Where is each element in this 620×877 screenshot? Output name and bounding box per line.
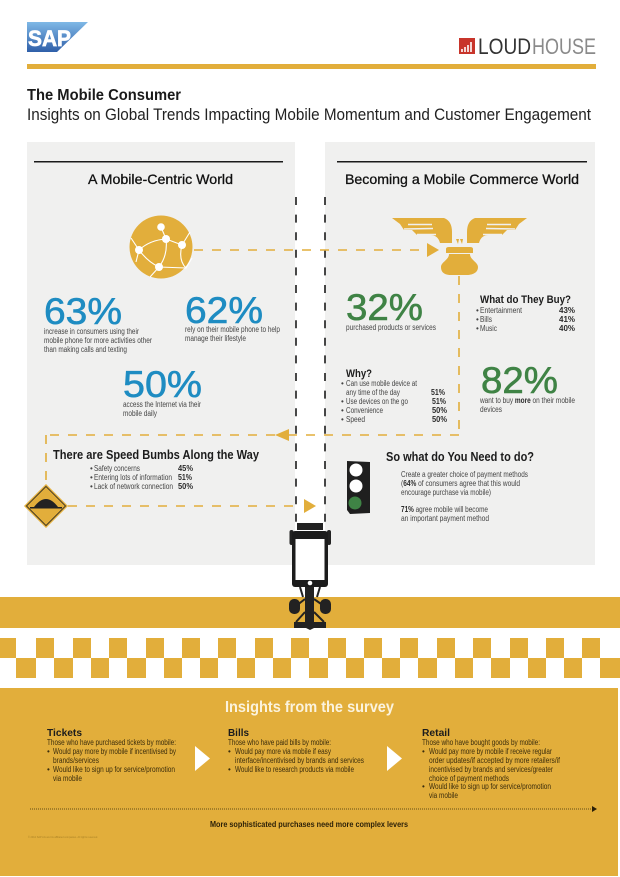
stat: 82%: 82% xyxy=(481,360,558,401)
list: What do They Buy?: 41% xyxy=(559,315,575,324)
column: retail: incentivised by brands and services/greater xyxy=(429,765,553,774)
stat: 62%: 62% xyxy=(185,290,263,331)
arrow: bell down and across to speed bump xyxy=(46,276,459,484)
stat: 32%: 32% xyxy=(346,287,423,328)
list: Why?: Can use mobile device at xyxy=(346,379,418,388)
heading and list: speed bumps: Entering lots of information xyxy=(94,473,172,482)
column: tickets: • xyxy=(47,765,50,774)
column: retail xyxy=(422,727,561,800)
column: bills: Those who have paid bills by mobile: xyxy=(228,738,331,747)
heading and list: speed bumps: • xyxy=(90,464,93,473)
heading: So what do You Need to do?: So what do You Need to do? xyxy=(386,450,534,464)
list: What do They Buy?: What do They Buy? xyxy=(480,294,571,306)
panel: insights from the survey xyxy=(0,688,618,876)
column: tickets: Would like to sign up for service/promotion xyxy=(53,765,175,774)
panel: mobile-centric world background xyxy=(27,142,295,565)
column: bills xyxy=(228,727,364,774)
stat: 62%: manage their lifestyle xyxy=(185,334,246,343)
text: payment methods advice: Create a greater choice of payment methods xyxy=(401,470,528,479)
logo: Loudhouse: LOUD xyxy=(478,34,531,59)
arrow: dotted progression line xyxy=(30,806,597,812)
column: retail: via mobile xyxy=(429,791,458,800)
list: What do They Buy?: • xyxy=(476,306,479,315)
heading: insights from the survey: Insights from the survey xyxy=(225,699,394,716)
stat: 63%: increase in consumers using their xyxy=(44,327,139,336)
logo: SAP xyxy=(27,22,88,52)
stat: 82% xyxy=(479,360,575,414)
heading and list: speed bumps: 51% xyxy=(178,473,192,482)
stat: 50%: mobile daily xyxy=(123,409,157,418)
column: retail: choice of payment methods xyxy=(429,774,509,783)
logo: Loudhouse xyxy=(459,34,596,59)
stat: 50%: access the Internet via their xyxy=(123,400,201,409)
column: bills: interface/incentivised by brands and services xyxy=(235,756,364,765)
list: What do They Buy?: 43% xyxy=(559,306,575,315)
list: Why?: Use devices on the go xyxy=(346,397,408,406)
text: payment methods advice xyxy=(401,470,528,523)
list: Why? xyxy=(341,368,447,424)
list: Why?: Why? xyxy=(346,368,372,380)
text: copyright: © 2012 SAP AG and its affiliated companies. All rights reserved. xyxy=(28,836,98,839)
stat: 62% xyxy=(185,290,280,343)
icon: phone car xyxy=(289,523,331,630)
column: tickets xyxy=(47,727,176,783)
column: retail: • xyxy=(422,782,425,791)
column: retail: Would pay more by mobile if receive regular xyxy=(429,747,552,756)
icon: globe network xyxy=(130,216,192,278)
column: tickets: • xyxy=(47,747,50,756)
logo: Loudhouse: HOUSE xyxy=(532,34,596,59)
column: retail: Those who have bought goods by mobile: xyxy=(422,738,540,747)
road band xyxy=(0,597,620,628)
list: What do They Buy?: Music xyxy=(480,324,497,333)
list: Why?: 51% xyxy=(432,397,446,406)
column: tickets: brands/services xyxy=(53,756,99,765)
list: Why?: • xyxy=(341,415,344,424)
heading and list: speed bumps: Lack of network connection xyxy=(94,482,173,491)
column: tickets: Those who have purchased tickets by mobile: xyxy=(47,738,176,747)
text: payment methods advice: an important payment method xyxy=(401,514,489,523)
list: What do They Buy?: • xyxy=(476,324,479,333)
arrow: tickets to bills xyxy=(195,746,210,771)
heading: Becoming a Mobile Commerce World: Becoming a Mobile Commerce World xyxy=(345,171,579,187)
column: retail: Retail xyxy=(422,727,450,739)
icon: traffic light xyxy=(347,461,370,514)
heading and list: speed bumps: • xyxy=(90,473,93,482)
stat: 82%: want to buy more on their mobile xyxy=(479,396,575,405)
arrow: globe to eagle xyxy=(194,243,439,257)
column: bills: Would like to research products via mobile xyxy=(235,765,354,774)
header gold bar xyxy=(27,64,596,69)
list: Why?: 51% xyxy=(431,388,445,397)
stat: 50%: 50% xyxy=(123,364,202,405)
chequered finish line xyxy=(0,638,620,678)
list: What do They Buy?: Entertainment xyxy=(480,306,523,315)
list: Why?: any time of the day xyxy=(346,388,400,397)
list: Why?: • xyxy=(341,397,344,406)
list: Why?: • xyxy=(341,406,344,415)
list: What do They Buy? xyxy=(476,294,575,333)
icon: speed bump sign xyxy=(24,484,68,528)
logo: SAP: SAP xyxy=(28,26,71,51)
list: Why?: • xyxy=(341,379,344,388)
heading and list: speed bumps xyxy=(53,448,259,491)
column: retail: • xyxy=(422,747,425,756)
list: Why?: 50% xyxy=(432,406,447,415)
heading and list: speed bumps: • xyxy=(90,482,93,491)
text: payment methods advice: (64% of consumers agree that this would xyxy=(401,479,520,488)
stat: 63% xyxy=(44,291,152,354)
heading: A Mobile-Centric World: A Mobile-Centric World xyxy=(88,171,233,187)
stat: 63%: mobile phone for more activities other xyxy=(44,336,152,345)
icon: winged bell xyxy=(392,218,527,275)
heading and list: speed bumps: 50% xyxy=(178,482,193,491)
list: Why?: 50% xyxy=(432,415,447,424)
stat: 62%: rely on their mobile phone to help xyxy=(185,325,280,334)
column: tickets: Would pay more by mobile if incentivised by xyxy=(53,747,176,756)
panel: mobile commerce world background xyxy=(325,142,595,565)
text: payment methods advice: 71% agree mobile will become xyxy=(401,505,488,514)
stat: 63%: than making calls and texting xyxy=(44,345,127,354)
column: bills: • xyxy=(228,747,231,756)
heading and list: speed bumps: 45% xyxy=(178,464,193,473)
list: What do They Buy?: Bills xyxy=(480,315,492,324)
road edge dashes xyxy=(296,197,325,524)
text: payment methods advice: encourage purchase via mobile) xyxy=(401,488,491,497)
column: retail: order updates/if accepted by more retailers/if xyxy=(429,756,561,765)
text: conclusion: More sophisticated purchases need more complex levers xyxy=(210,819,408,829)
column: bills: • xyxy=(228,765,231,774)
heading and list: speed bumps: There are Speed Bumbs Along the Way xyxy=(53,448,259,462)
column: tickets: via mobile xyxy=(53,774,82,783)
list: What do They Buy?: • xyxy=(476,315,479,324)
stat: 32%: purchased products or services xyxy=(346,323,436,332)
arrow: speed bump to phone xyxy=(68,499,316,513)
column: tickets: Tickets xyxy=(47,727,82,739)
column: bills: Bills xyxy=(228,727,249,739)
list: Why?: Convenience xyxy=(346,406,383,415)
list: Why?: Speed xyxy=(346,415,365,424)
heading and list: speed bumps: Safety concerns xyxy=(94,464,140,473)
column: bills: Would pay more via mobile if easy xyxy=(235,747,331,756)
arrow: bills to retail xyxy=(387,746,402,771)
column: retail: Would like to sign up for service/promotion xyxy=(429,782,551,791)
stat: 82%: devices xyxy=(480,405,502,414)
title: The Mobile Consumer xyxy=(27,87,181,104)
stat: 63%: 63% xyxy=(44,291,122,332)
list: What do They Buy?: 40% xyxy=(559,324,575,333)
